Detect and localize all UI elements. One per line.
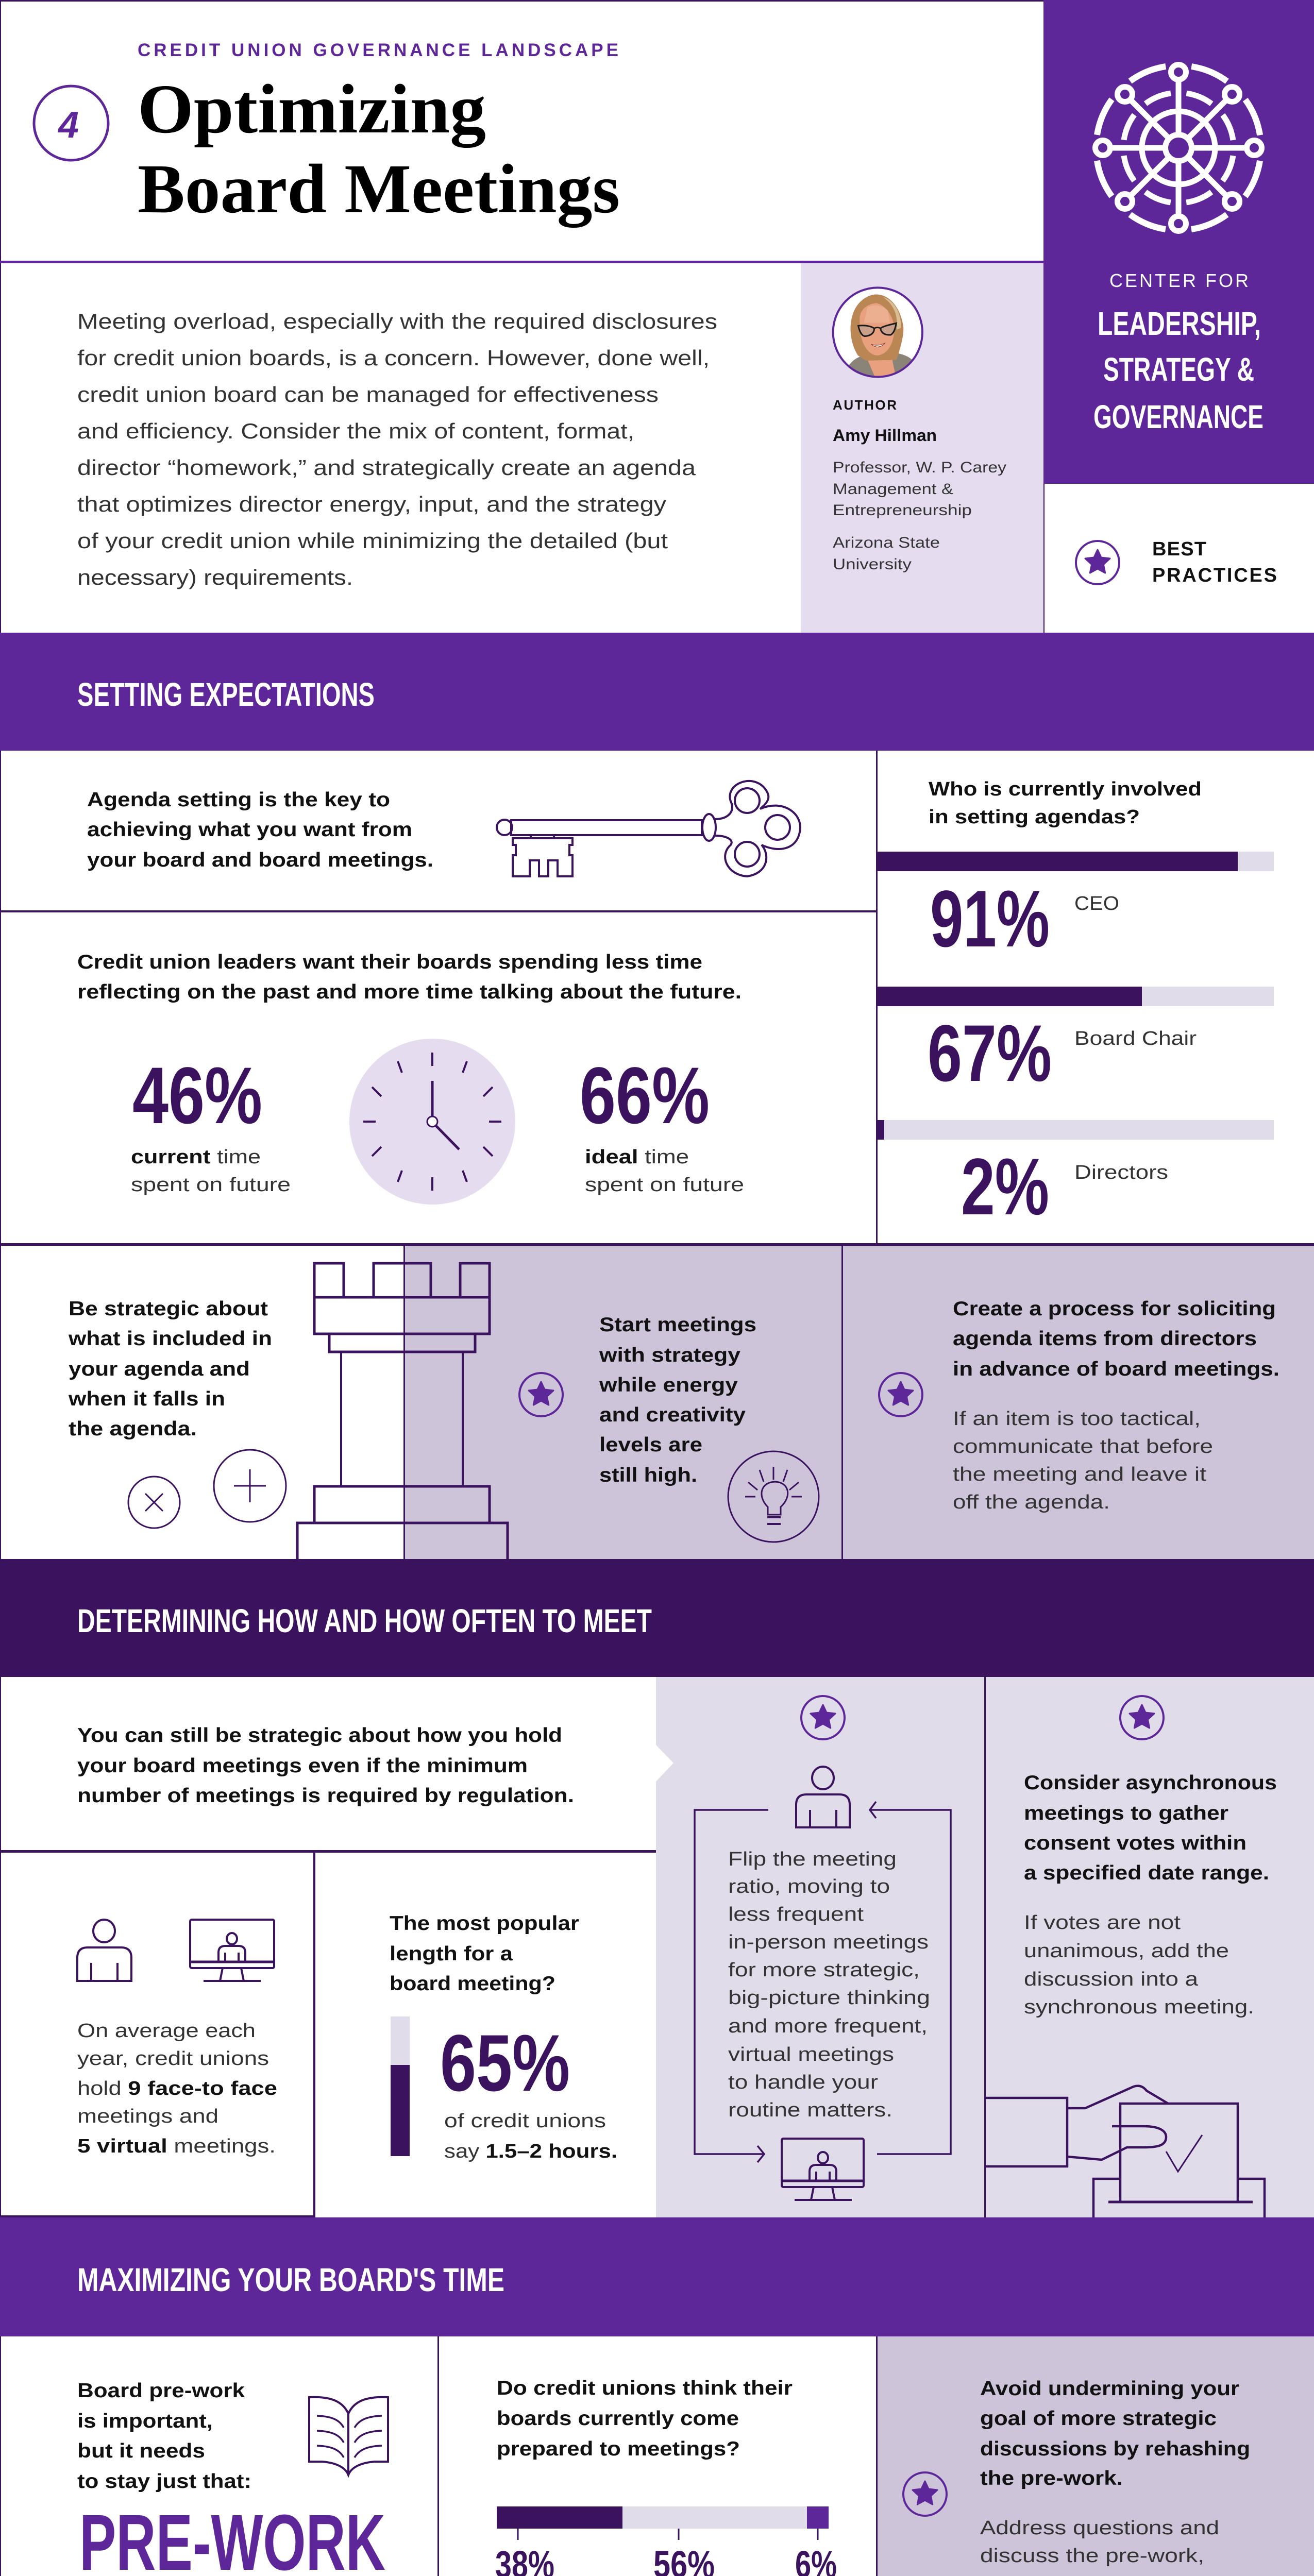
text: avoid: the pre-work. xyxy=(980,2467,1123,2489)
text: flip ratio: ratio, moving to xyxy=(728,1876,890,1897)
text: asynchronous: synchronous meeting. xyxy=(1024,1996,1254,2018)
icon: star badge xyxy=(1076,541,1119,584)
panel: author xyxy=(801,263,1043,633)
center name: CENTER FOR xyxy=(1109,270,1249,291)
text: leaders want: Credit union leaders want their boards spending less time xyxy=(77,951,702,973)
legend: best practices xyxy=(1043,484,1277,633)
text: asynchronous: consent votes within xyxy=(1024,1832,1246,1854)
panel: agenda key xyxy=(0,751,878,1244)
center name: LEADERSHIP, xyxy=(1098,305,1261,342)
question: prepared to meetings? xyxy=(497,2438,740,2460)
text: asynchronous: unanimous, add the xyxy=(1024,1940,1229,1962)
text: asynchronous: meetings to gather xyxy=(1024,1802,1228,1824)
icon: ballot box and hand xyxy=(985,2086,1265,2217)
bar: board chair: 67% xyxy=(928,1009,1052,1098)
intro text: that optimizes director energy, input, and the strategy xyxy=(77,492,666,516)
text: average meetings: On average each xyxy=(77,2020,256,2042)
text: leaders want xyxy=(77,951,742,1003)
icon: star badge xyxy=(903,2472,947,2516)
icon: chess rook xyxy=(297,1263,508,1559)
icon: person xyxy=(77,1920,131,1981)
panel: meeting length xyxy=(390,1912,617,2162)
text: create a process: off the agenda. xyxy=(953,1492,1110,1513)
text: avoid: goal of more strategic xyxy=(980,2408,1217,2430)
arrow: cycle loop xyxy=(695,1802,951,2162)
stat label: of credit unions xyxy=(444,2110,606,2132)
text: create a process: communicate that before xyxy=(953,1436,1213,1458)
icon: clock xyxy=(349,1039,515,1205)
intro text: of your credit union while minimizing the detailed (but xyxy=(77,529,668,553)
author affiliation: Management & xyxy=(833,481,953,498)
vertical bar xyxy=(391,2016,410,2156)
bar: board chair xyxy=(877,987,1274,1098)
text: create a process: the meeting and leave it xyxy=(953,1464,1207,1485)
text: be strategic: the agenda. xyxy=(69,1418,197,1440)
text: create a process: in advance of board meetings. xyxy=(953,1358,1279,1380)
text: be strategic: what is included in xyxy=(68,1328,272,1350)
chart: prepared to meetings xyxy=(495,2377,837,2576)
panel: flip the meeting ratio xyxy=(695,1696,951,2200)
panel: future time xyxy=(77,951,744,1205)
text: be strategic xyxy=(68,1298,272,1440)
text: create a process xyxy=(953,1298,1279,1513)
text: agenda setting: your board and board meetings. xyxy=(87,849,433,871)
question: Who is currently involved xyxy=(929,778,1202,800)
stat: 46%: current time xyxy=(131,1146,261,1168)
intro text xyxy=(77,309,717,589)
text: create a process: Create a process for soliciting xyxy=(953,1298,1276,1320)
text: avoid: discuss the pre-work, xyxy=(980,2545,1204,2567)
author affiliation xyxy=(833,459,1006,573)
icon: open book xyxy=(309,2397,388,2475)
intro text: credit union board can be managed for effectiveness xyxy=(77,382,659,406)
question: The most popular xyxy=(390,1912,579,1935)
question: Do credit unions think their xyxy=(497,2377,793,2399)
icon: monitor person xyxy=(782,2139,864,2200)
stat: 66%: ideal time xyxy=(585,1146,689,1168)
stat label: say 1.5–2 hours. xyxy=(444,2141,617,2162)
icon: monitor person xyxy=(190,1920,274,1981)
text: asynchronous: a specified date range. xyxy=(1024,1862,1269,1884)
legend label: BEST xyxy=(1152,538,1206,560)
author label: AUTHOR xyxy=(833,397,897,413)
text: avoid: Avoid undermining your xyxy=(980,2378,1239,2400)
icon: star badge xyxy=(801,1696,845,1739)
icon: star badge xyxy=(1120,1696,1164,1739)
icon: number 4: 4 xyxy=(57,105,79,146)
chart: who sets agendas xyxy=(877,778,1274,1232)
text: still be strategic: You can still be strategic about how you hold xyxy=(77,1724,562,1747)
text: start meetings: Start meetings xyxy=(599,1314,756,1336)
question: boards currently come xyxy=(497,2408,739,2430)
stat: 65%: 65% xyxy=(440,2019,570,2108)
title: Optimizing xyxy=(138,71,486,148)
stat: 66%: spent on future xyxy=(585,1174,744,1196)
text: board pre-work: is important, xyxy=(77,2410,213,2432)
legend label: PRACTICES xyxy=(1152,565,1277,586)
text: start meetings: with strategy xyxy=(599,1344,740,1366)
text: flip ratio: big-picture thinking xyxy=(728,1987,930,2009)
stat label xyxy=(444,2110,617,2162)
question xyxy=(497,2377,793,2460)
text: be strategic: your agenda and xyxy=(69,1358,250,1380)
text: average meetings: 5 virtual meetings. xyxy=(77,2136,276,2157)
text: start meetings: and creativity xyxy=(599,1404,746,1426)
text: avoid xyxy=(980,2378,1250,2576)
text: leaders want: reflecting on the past and more time talking about the future. xyxy=(77,981,742,1003)
bar: directors: Directors xyxy=(1074,1162,1168,1183)
text: flip ratio: virtual meetings xyxy=(728,2044,894,2065)
icon: minus circle xyxy=(128,1477,180,1528)
text: avoid: discussions by rehashing xyxy=(980,2438,1250,2460)
bar: CEO xyxy=(877,852,1274,964)
author affiliation: Professor, W. P. Carey xyxy=(833,459,1006,476)
text: flip ratio: in-person meetings xyxy=(728,1931,929,1953)
legend label xyxy=(1152,538,1277,586)
title: Board Meetings xyxy=(138,150,620,228)
icon: key xyxy=(497,781,800,876)
stat: 46%: spent on future xyxy=(131,1174,291,1196)
text: average meetings: hold 9 face-to face xyxy=(77,2078,277,2099)
stat: 46%: 46% xyxy=(132,1051,262,1141)
text: asynchronous: Consider asynchronous xyxy=(1024,1772,1277,1794)
text: be strategic: when it falls in xyxy=(68,1388,225,1410)
panel: meetings per year xyxy=(77,1920,277,2157)
bar: CEO: CEO xyxy=(1074,893,1119,914)
text: average meetings: meetings and xyxy=(77,2106,218,2127)
text: board pre-work: Board pre-work xyxy=(77,2380,245,2402)
text: flip ratio: routine matters. xyxy=(728,2099,892,2121)
section heading: maximizing time xyxy=(0,2217,1314,2336)
icon: plus circle xyxy=(214,1450,286,1522)
section heading: maximizing time: MAXIMIZING YOUR BOARD'S TIME xyxy=(77,2261,504,2298)
text: start meetings: still high. xyxy=(599,1464,697,1486)
author affiliation: Arizona State xyxy=(833,534,940,551)
icon: number 4 xyxy=(34,86,108,160)
text: board pre-work xyxy=(77,2380,251,2493)
author portrait xyxy=(833,287,922,381)
text: still be strategic: number of meetings is required by regulation. xyxy=(77,1785,574,1807)
text: create a process: agenda items from directors xyxy=(953,1328,1257,1350)
section heading: setting expectations: SETTING EXPECTATIONS xyxy=(77,676,375,713)
question xyxy=(929,778,1202,828)
stat: 46% xyxy=(131,1051,291,1196)
bar: directors: 2% xyxy=(961,1142,1049,1232)
text: start meetings: while energy xyxy=(599,1374,738,1396)
icon: star badge xyxy=(519,1373,563,1416)
icon: person xyxy=(796,1767,850,1827)
intro text: Meeting overload, especially with the required disclosures xyxy=(77,309,717,333)
question: length for a xyxy=(390,1943,513,1965)
intro text: for credit union boards, is a concern. However, done well, xyxy=(77,346,710,370)
bar: directors xyxy=(877,1120,1274,1232)
panel: strategic agenda row xyxy=(0,1243,1314,1559)
bar: board chair: Board Chair xyxy=(1074,1028,1197,1049)
question xyxy=(390,1912,579,1995)
title xyxy=(138,71,620,228)
text: flip ratio xyxy=(728,1849,930,2121)
text: asynchronous: discussion into a xyxy=(1024,1969,1199,1990)
intro text: necessary) requirements. xyxy=(77,565,353,589)
bar: CEO: 91% xyxy=(930,874,1050,964)
text: start meetings xyxy=(599,1314,756,1486)
section heading: determining how xyxy=(0,1559,1314,1677)
section heading: determining how: DETERMINING HOW AND HOW OFTEN TO MEET xyxy=(77,1602,652,1639)
text: still be strategic: your board meetings even if the minimum xyxy=(77,1755,528,1777)
author name: Amy Hillman xyxy=(833,426,937,445)
text: agenda setting: achieving what you want from xyxy=(87,819,412,841)
stacked bar xyxy=(497,2506,829,2540)
text: flip ratio: Flip the meeting xyxy=(728,1849,897,1870)
center name: STRATEGY & xyxy=(1103,351,1254,388)
icon: star badge xyxy=(879,1373,922,1416)
text: average meetings: year, credit unions xyxy=(77,2048,269,2070)
text: asynchronous: If votes are not xyxy=(1024,1912,1181,1934)
text: asynchronous xyxy=(1024,1772,1277,2018)
icon: center logo wheel xyxy=(1096,65,1261,231)
text: average meetings xyxy=(77,2020,277,2157)
text: create a process: If an item is too tactical, xyxy=(953,1408,1201,1430)
icon: lightbulb xyxy=(728,1451,819,1542)
text: board pre-work: but it needs xyxy=(77,2440,205,2462)
text: start meetings: levels are xyxy=(599,1434,702,1456)
author affiliation: Entrepreneurship xyxy=(833,502,972,519)
panel: pre-work xyxy=(77,2336,439,2576)
section heading: setting expectations xyxy=(0,633,1314,751)
text: be strategic: Be strategic about xyxy=(69,1298,268,1320)
question: in setting agendas? xyxy=(929,806,1140,828)
panel: asynchronous meetings xyxy=(985,1696,1277,2217)
panel: avoid undermining xyxy=(876,2336,1314,2576)
text: flip ratio: less frequent xyxy=(728,1904,864,1925)
panel: center for leadership xyxy=(1043,0,1314,484)
stat labels xyxy=(495,2543,837,2576)
center name xyxy=(1093,270,1264,435)
text: flip ratio: to handle your xyxy=(728,2072,878,2093)
panel: flip the ratio background xyxy=(0,1677,1314,2217)
text: agenda setting xyxy=(87,789,433,871)
text: board pre-work: to stay just that: xyxy=(77,2470,251,2493)
text: still be strategic xyxy=(77,1724,574,1807)
text: agenda setting: Agenda setting is the key to xyxy=(87,789,390,811)
intro text: and efficiency. Consider the mix of content, format, xyxy=(77,419,634,443)
author affiliation: University xyxy=(833,556,912,573)
kicker: CREDIT UNION GOVERNANCE LANDSCAPE xyxy=(138,40,618,60)
intro text: director “homework,” and strategically create an agenda xyxy=(77,455,696,480)
question: board meeting? xyxy=(390,1973,555,1995)
stat: 66% xyxy=(580,1051,744,1196)
text: flip ratio: and more frequent, xyxy=(728,2015,928,2037)
text: avoid: Address questions and xyxy=(980,2517,1219,2539)
text: flip ratio: for more strategic, xyxy=(728,1959,920,1981)
stat: 66%: 66% xyxy=(580,1051,710,1141)
